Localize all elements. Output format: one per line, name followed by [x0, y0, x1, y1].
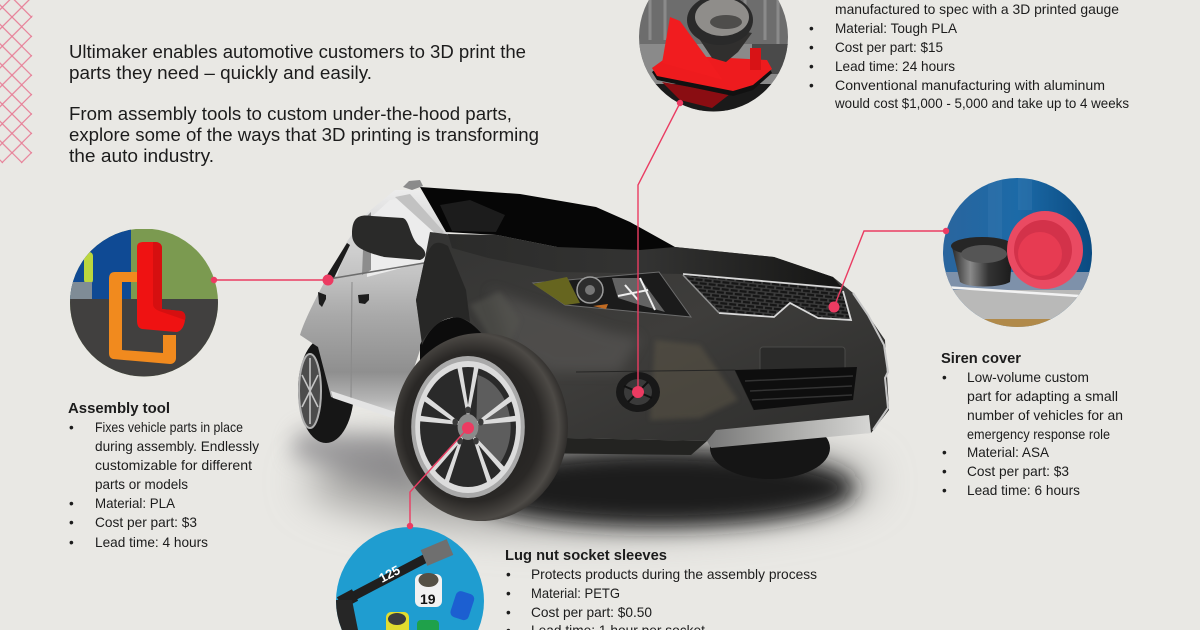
right edge chrome: [853, 293, 888, 430]
text block: headlight gauge: Conventional manufacturing with aluminum: [835, 78, 1105, 93]
list: assembly tool: parts or models: [95, 477, 188, 492]
licence plate recess: [760, 347, 845, 376]
text block: headlight gauge: •: [809, 40, 814, 55]
text block: headlight gauge: [809, 2, 1129, 111]
text block: headlight gauge: •: [809, 78, 814, 93]
photo: siren cover: [943, 178, 1093, 329]
wing sheen: [470, 292, 520, 360]
list: assembly tool: Material: PLA: [95, 496, 176, 511]
intro text: Ultimaker enables automotive customers to 3D print the: [69, 42, 526, 62]
list: assembly tool: •: [69, 420, 74, 435]
decorative lattice pattern: [0, 0, 32, 164]
text block: headlight gauge: •: [809, 59, 814, 74]
intro text: the auto industry.: [69, 146, 214, 166]
window reflections: [323, 194, 444, 280]
list: siren cover: emergency response role: [967, 427, 1110, 442]
list: lug nut socket sleeves: Protects products during the assembly process: [531, 567, 817, 582]
photo: assembly tool: [70, 229, 218, 377]
heading: lug nut socket sleeves: Lug nut socket sleeves: [505, 547, 667, 564]
roof rail: [403, 180, 423, 190]
list: assembly tool: Cost per part: $3: [95, 515, 197, 530]
intro text: [69, 42, 539, 166]
list: assembly tool: Fixes vehicle parts in place: [95, 420, 243, 435]
heading: assembly tool: Assembly tool: [68, 400, 170, 417]
text block: assembly tool: [68, 400, 259, 550]
lug photo dot: [407, 523, 413, 529]
main front body: [416, 232, 889, 441]
front wheel: [394, 333, 568, 521]
intro text: parts they need – quickly and easily.: [69, 63, 372, 83]
wheel arch: [420, 317, 522, 440]
marker dots on car: [322, 274, 840, 434]
windshield and roof: [420, 187, 675, 250]
connector: headlight bracket: [638, 103, 680, 392]
lower intake: [735, 367, 857, 410]
door handles: [318, 292, 369, 307]
list: lug nut socket sleeves: •: [506, 567, 511, 582]
list: siren cover: •: [942, 445, 947, 460]
photo: lug nut sleeves: 125: [376, 562, 403, 586]
text block: siren cover: [941, 350, 1123, 498]
list: siren cover: Cost per part: $3: [967, 464, 1069, 479]
hood: [448, 234, 842, 288]
list: assembly tool: •: [69, 496, 74, 511]
car illustration: [290, 180, 889, 532]
list: assembly tool: customizable for different: [95, 458, 252, 473]
silver lower skirt: [707, 415, 871, 448]
far front wheel: [710, 417, 830, 479]
list: siren cover: number of vehicles for an: [967, 408, 1123, 423]
wing mirror: [352, 216, 425, 260]
rear wheel: [298, 337, 354, 443]
list: lug nut socket sleeves: •: [506, 586, 511, 601]
list: siren cover: Material: ASA: [967, 445, 1050, 460]
connector: siren cover: [834, 231, 946, 307]
list: assembly tool: •: [69, 535, 74, 550]
list: siren cover: Low-volume custom: [967, 370, 1089, 385]
intro text: From assembly tools to custom under-the-hood parts,: [69, 104, 512, 124]
heading: siren cover: Siren cover: [941, 350, 1021, 367]
list: siren cover: Lead time: 6 hours: [967, 483, 1080, 498]
text block: headlight gauge: Cost per part: $15: [835, 40, 943, 55]
text block: headlight gauge: Material: Tough PLA: [835, 21, 958, 36]
list: siren cover: •: [942, 464, 947, 479]
connector: assembly tool: [214, 279, 328, 281]
list: siren cover: •: [942, 483, 947, 498]
text block: headlight gauge: •: [809, 21, 814, 36]
fog lamp: [616, 372, 660, 412]
list: siren cover: [942, 370, 1123, 498]
list: lug nut socket sleeves: Material: PETG: [531, 586, 620, 601]
list: assembly tool: during assembly. Endlessly: [95, 439, 259, 454]
text block: lug nut socket sleeves: [505, 547, 817, 630]
siren photo dot: [943, 228, 949, 234]
headlight: [533, 272, 691, 317]
grille: [683, 274, 851, 320]
fender dark reflection: [416, 243, 470, 342]
list: siren cover: •: [942, 370, 947, 385]
list: assembly tool: •: [69, 515, 74, 530]
side sill: [331, 391, 395, 419]
text block: headlight gauge: would cost $1,000 - 5,000 and take up to 4 weeks: [834, 96, 1129, 111]
fender highlight: [490, 290, 640, 372]
gauge photo dot: [677, 100, 683, 106]
assembly photo dot: [211, 277, 217, 283]
list: lug nut socket sleeves: •: [506, 605, 511, 620]
photo: lug nut sleeves: [336, 527, 484, 630]
silver side body: [300, 190, 450, 418]
windshield reflection: [440, 200, 505, 232]
bumper crease: [576, 370, 754, 410]
list: lug nut socket sleeves: [506, 567, 817, 630]
text block: headlight gauge: manufactured to spec with a 3D printed gauge: [835, 2, 1119, 17]
photo: headlight gauge: [639, 0, 792, 114]
list: siren cover: part for adapting a small: [967, 389, 1118, 404]
list: assembly tool: [69, 420, 259, 550]
list: lug nut socket sleeves: Cost per part: $0.50: [531, 605, 652, 620]
list: assembly tool: Lead time: 4 hours: [95, 535, 208, 550]
intro text: explore some of the ways that 3D printing is transforming: [69, 125, 539, 145]
ground shadow: [290, 430, 875, 532]
connector: lug nut: [410, 428, 468, 526]
door seam: [351, 282, 352, 398]
bumper reflection: [650, 340, 738, 420]
text block: headlight gauge: Lead time: 24 hours: [835, 59, 955, 74]
black lower lip: [521, 437, 707, 455]
photo: lug nut sleeves: 19: [420, 591, 436, 607]
